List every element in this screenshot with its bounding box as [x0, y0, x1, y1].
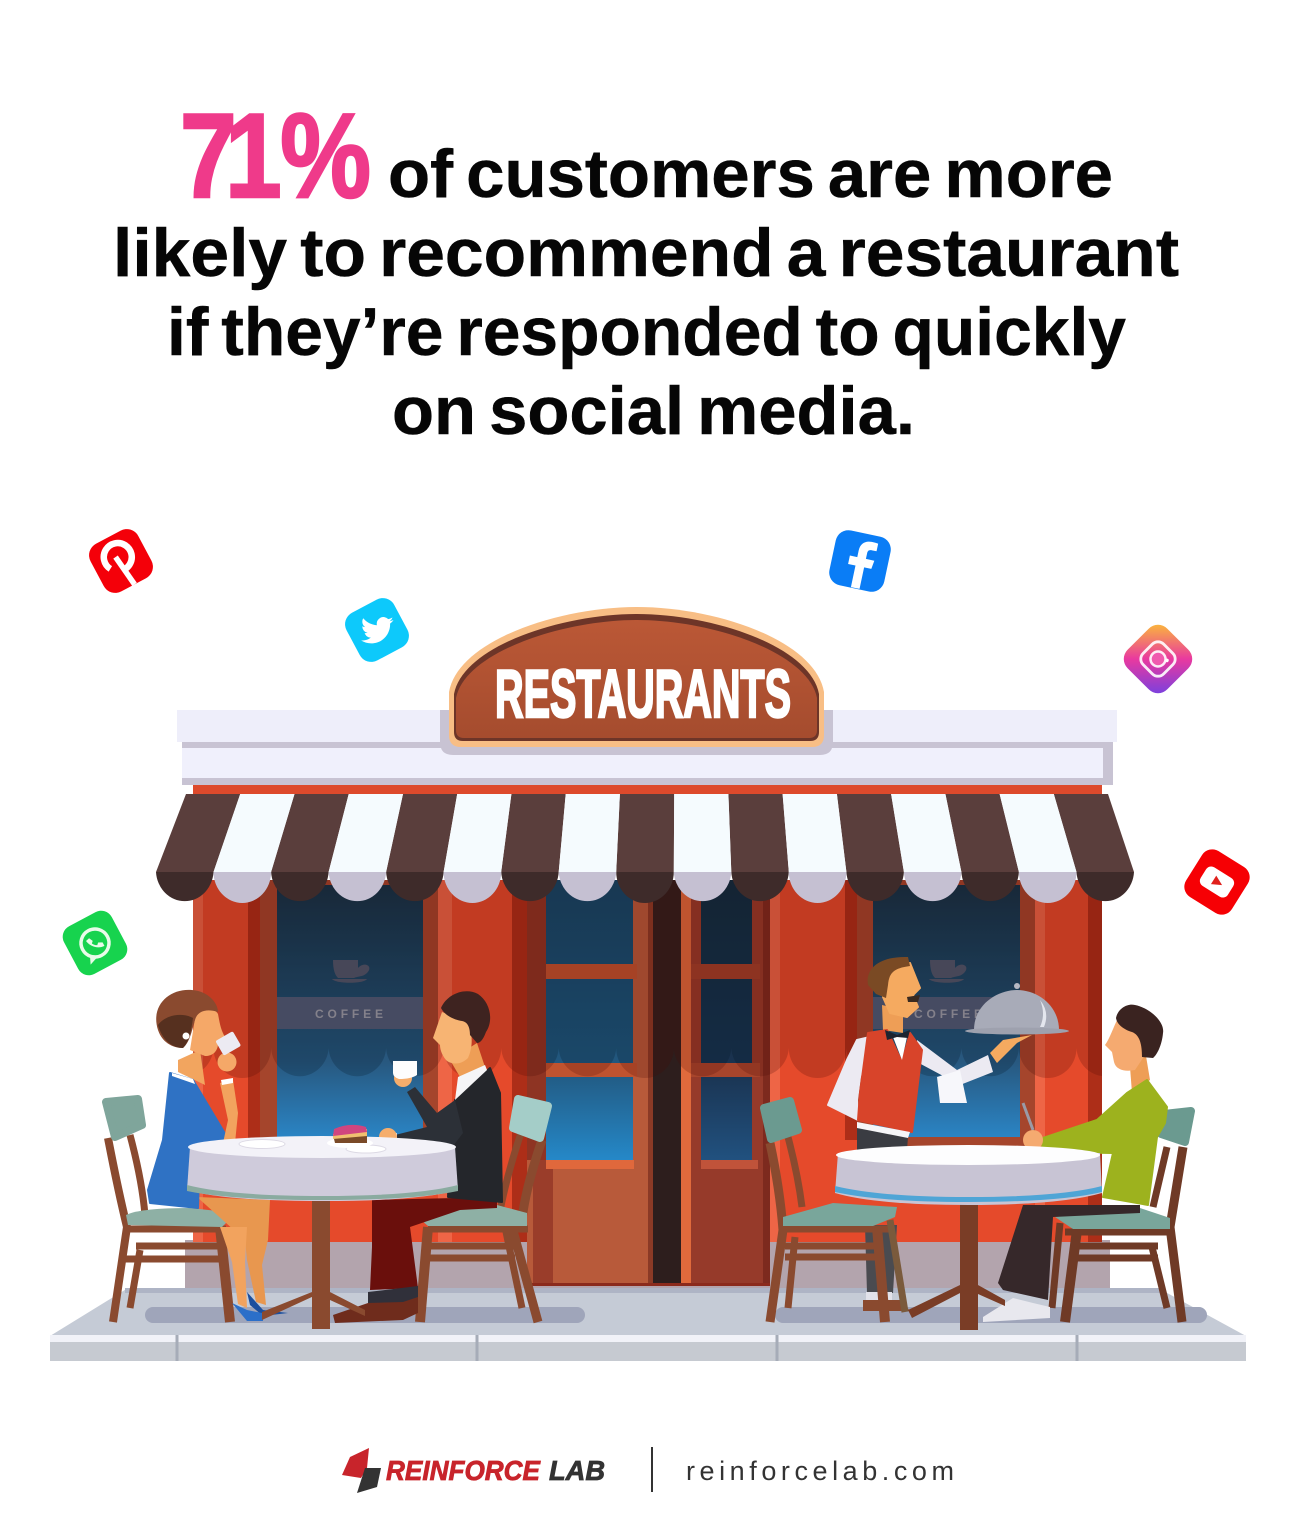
person: diner in green sweater [983, 1005, 1167, 1322]
red shop wall [193, 880, 1102, 1242]
heading line 3: if they’re responded to quickly [167, 294, 1126, 370]
icon: whatsapp [58, 906, 132, 980]
left chair seat [126, 1208, 236, 1227]
group: chair by waiter [770, 1137, 802, 1322]
divider [651, 1447, 653, 1492]
heading line 4: on social media. [392, 373, 915, 449]
footer: logo and url [342, 1447, 954, 1493]
icon: pinterest [84, 524, 158, 598]
panel: right window [857, 880, 1035, 1148]
awning shadow on wall [156, 880, 1134, 1078]
panel: left table [187, 1125, 458, 1329]
panel: double doors [527, 880, 770, 1285]
icon: facebook [827, 528, 893, 594]
panel: roof cornice [177, 710, 1117, 794]
person: waiter with cloche [828, 957, 1069, 1311]
person: man in black suit [333, 991, 502, 1323]
logo wordmark lab: LAB [549, 1455, 605, 1486]
icon: coffee cup [929, 960, 966, 983]
building base [185, 1240, 1110, 1290]
stat: 71%: 71% [180, 88, 371, 223]
logo wordmark: REINFORCE [386, 1455, 541, 1486]
waiter chair seat [783, 1203, 897, 1226]
icon: youtube [1180, 845, 1254, 919]
illustration: restaurant scene [50, 607, 1246, 1361]
sign lettering: RESTAURANTS [495, 656, 791, 732]
right chair seat [412, 1205, 527, 1226]
diner chair seat [1055, 1208, 1170, 1229]
icon: instagram [1118, 619, 1198, 699]
icon: twitter [340, 593, 414, 667]
awning shadow on glass [277, 880, 1020, 1076]
group: left chair (woman) [106, 1099, 230, 1322]
plate [239, 1140, 285, 1148]
waiter chair front parts [764, 1101, 905, 1322]
plate [346, 1145, 386, 1153]
group: right chair (man) [420, 1099, 548, 1322]
group: chair by diner [1052, 1111, 1191, 1322]
window label: COFFEE [914, 1007, 982, 1021]
title: headline statistic [113, 88, 1179, 449]
panel: right table [835, 1145, 1102, 1330]
website url: reinforcelab.com [686, 1456, 954, 1486]
panel: striped awning [156, 794, 1134, 903]
icon: silver cloche [965, 983, 1069, 1034]
panel: restaurants sign [440, 607, 833, 755]
heading line 1: of customers are more [388, 136, 1113, 212]
person: woman in blue dress [148, 990, 288, 1321]
cake on plate [327, 1125, 373, 1148]
icon: coffee cup [332, 960, 369, 983]
window label: COFFEE [315, 1007, 383, 1021]
panel: sidewalk [50, 1288, 1246, 1361]
heading line 2: likely to recommend a restaurant [113, 215, 1179, 291]
logo mark [342, 1448, 381, 1493]
panel: left window [260, 880, 438, 1148]
